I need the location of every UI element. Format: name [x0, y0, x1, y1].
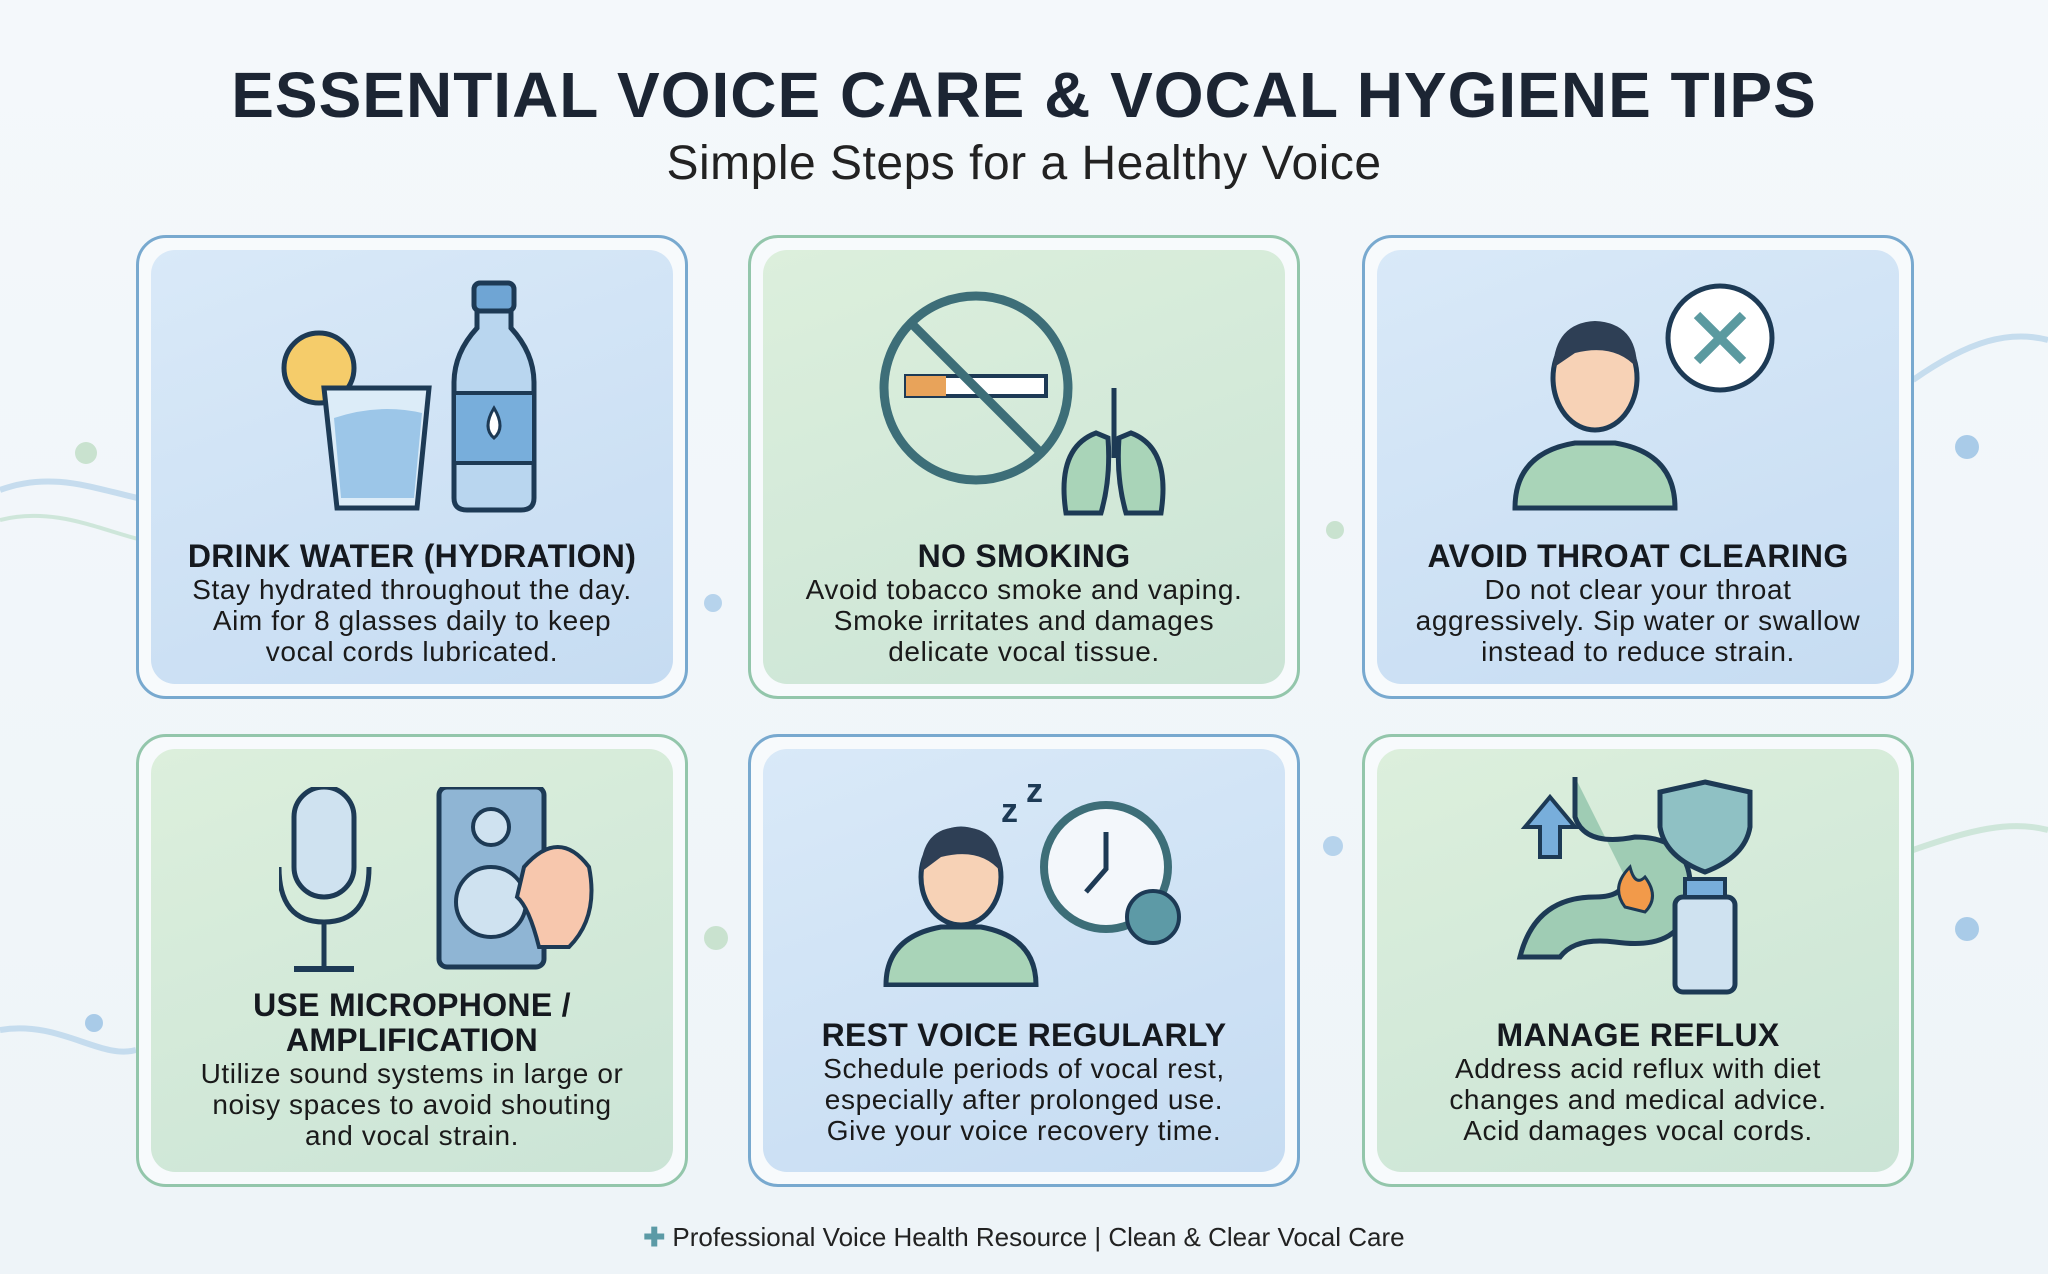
title: ESSENTIAL VOICE CARE & VOCAL HYGIENE TIPS [231, 59, 1817, 131]
text: drink water [188, 538, 636, 667]
text: no smoking: Avoid tobacco smoke and vaping. [806, 574, 1242, 605]
icon: sleeping person and clock: z [1001, 792, 1018, 830]
text: use microphone: USE MICROPHONE / [253, 987, 571, 1023]
panel: no smoking [748, 235, 1300, 699]
text: rest voice [822, 1017, 1226, 1146]
text: avoid throat clearing: Do not clear your throat [1484, 574, 1792, 605]
text: drink water: Stay hydrated throughout the day. [192, 574, 632, 605]
text: rest voice: Schedule periods of vocal rest, [823, 1053, 1225, 1084]
text: avoid throat clearing [1416, 538, 1860, 667]
text: manage reflux: Acid damages vocal cords. [1463, 1115, 1813, 1146]
panel: use microphone [136, 734, 688, 1187]
icon: person with x bubble [1512, 284, 1774, 510]
panel: rest voice [748, 734, 1300, 1187]
icon: sleeping person and clock [884, 777, 1181, 987]
footer: ✚ Professional Voice Health Resource | Clean & Clear Vocal Care [643, 1222, 1405, 1252]
text: rest voice: especially after prolonged use. [825, 1084, 1223, 1115]
text: drink water: DRINK WATER (HYDRATION) [188, 538, 636, 574]
text: no smoking: NO SMOKING [918, 538, 1130, 574]
text: manage reflux: MANAGE REFLUX [1496, 1017, 1780, 1053]
text: use microphone [201, 987, 623, 1151]
text: no smoking: Smoke irritates and damages [834, 605, 1214, 636]
icon: no smoking and lungs [880, 292, 1166, 516]
text: use microphone: AMPLIFICATION [286, 1022, 538, 1058]
text: avoid throat clearing: instead to reduce strain. [1481, 636, 1795, 667]
text: manage reflux: Address acid reflux with diet [1455, 1053, 1821, 1084]
panel: drink water [136, 235, 688, 699]
text: drink water: Aim for 8 glasses daily to keep [213, 605, 611, 636]
text: rest voice: Give your voice recovery time. [827, 1115, 1221, 1146]
panel: avoid throat clearing [1362, 235, 1914, 699]
text: manage reflux [1449, 1017, 1827, 1146]
subtitle: Simple Steps for a Healthy Voice [666, 137, 1382, 190]
text: manage reflux: changes and medical advice. [1449, 1084, 1827, 1115]
text: avoid throat clearing: AVOID THROAT CLEARING [1427, 538, 1849, 574]
panel: manage reflux [1362, 734, 1914, 1187]
icon: stomach, flame, shield, bottle [1516, 777, 1752, 994]
text: use microphone: Utilize sound systems in large or [201, 1058, 623, 1089]
text: avoid throat clearing: aggressively. Sip water or swallow [1416, 605, 1860, 636]
icon: microphone and speaker [279, 787, 594, 972]
text: drink water: vocal cords lubricated. [266, 636, 558, 667]
text: no smoking [806, 538, 1242, 667]
text: rest voice: REST VOICE REGULARLY [822, 1017, 1226, 1053]
text: use microphone: and vocal strain. [305, 1120, 519, 1151]
icon: glass and bottle [282, 280, 536, 512]
text: use microphone: noisy spaces to avoid shouting [212, 1089, 612, 1120]
text: no smoking: delicate vocal tissue. [888, 636, 1160, 667]
